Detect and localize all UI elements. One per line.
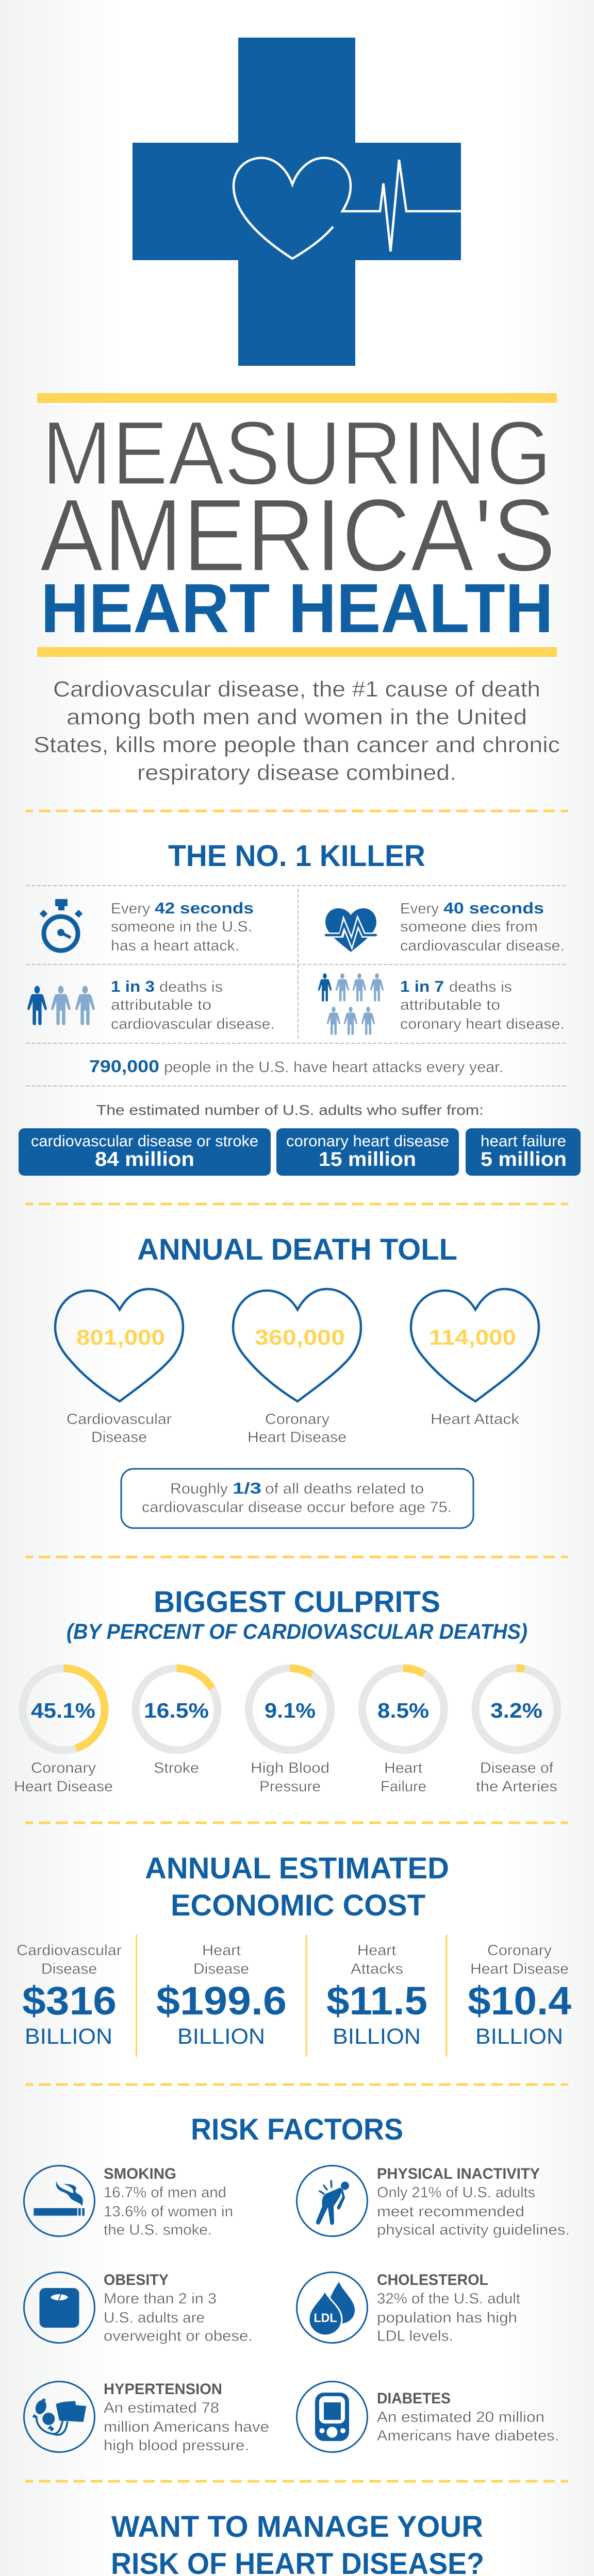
ring: high blood pressure 9.1%: High Blood bbox=[251, 1760, 329, 1776]
text: 1 in 3 deaths: attributable to bbox=[111, 997, 211, 1013]
title: MEASURING bbox=[42, 403, 552, 504]
text: diabetes: Americans have diabetes. bbox=[377, 2428, 559, 2444]
stat: heart attacks $11.5 billion bbox=[326, 1942, 427, 2049]
box: cardiovascular disease or stroke bbox=[19, 1128, 271, 1176]
section: annual death toll bbox=[55, 1233, 539, 1528]
text: cholesterol: 32% of the U.S. adult bbox=[377, 2291, 520, 2307]
box: cardiovascular disease or stroke: 84 million bbox=[95, 1148, 194, 1171]
ring: heart failure 8.5%: Failure bbox=[381, 1778, 426, 1795]
ring: heart failure 8.5% bbox=[362, 1668, 444, 1795]
stat: heart attacks $11.5 billion: Heart bbox=[357, 1942, 396, 1959]
ring: heart failure 8.5%: Heart bbox=[384, 1760, 422, 1776]
heart: heart attack bbox=[411, 1289, 539, 1428]
text: smoking: 16.7% of men and bbox=[104, 2184, 226, 2201]
icon: 1 in 3 people bbox=[27, 986, 95, 1025]
heart: heart attack: 114,000 bbox=[429, 1325, 516, 1349]
ring: stroke 16.5%: 16.5% bbox=[144, 1699, 209, 1722]
text: hypertension: million Americans have bbox=[104, 2419, 269, 2435]
stat: cardiovascular disease $316 billion: $316 bbox=[22, 1979, 117, 2023]
stat: cardiovascular disease $316 billion: BILLION bbox=[25, 2024, 112, 2049]
heart: coronary heart disease bbox=[233, 1289, 361, 1446]
ring: coronary heart disease 45.1%: Coronary bbox=[31, 1760, 96, 1776]
text: physical inactivity: meet recommended bbox=[377, 2204, 524, 2220]
text: obesity: More than 2 in 3 bbox=[104, 2291, 217, 2307]
callout: 1/3 before age 75: of all deaths related to bbox=[265, 1481, 424, 1497]
heading: annual death toll: ANNUAL DEATH TOLL bbox=[137, 1233, 457, 1266]
ring: coronary heart disease 45.1% bbox=[14, 1668, 113, 1795]
icon: cigarette bbox=[24, 2166, 95, 2236]
ring: coronary heart disease 45.1%: 45.1% bbox=[31, 1699, 95, 1722]
ring: high blood pressure 9.1% bbox=[249, 1668, 331, 1795]
section: risk factors bbox=[24, 2113, 570, 2454]
heart: coronary heart disease: 360,000 bbox=[255, 1325, 345, 1349]
icon: blue medical cross with heart and heartbeat line bbox=[133, 38, 461, 366]
text: physical inactivity bbox=[377, 2165, 570, 2238]
heading: annual estimated economic cost: ECONOMIC COST bbox=[171, 1889, 425, 1922]
text: 1 in 7 deaths: deaths is bbox=[449, 979, 512, 995]
heading: biggest culprits: BIGGEST CULPRITS bbox=[154, 1585, 440, 1619]
text: 790,000 heart attacks: 790,000 bbox=[89, 1057, 159, 1076]
text: physical inactivity: Only 21% of U.S. adults bbox=[377, 2184, 535, 2201]
ring: high blood pressure 9.1%: 9.1% bbox=[265, 1699, 316, 1722]
text: every 42 seconds bbox=[111, 899, 254, 954]
text: physical inactivity: physical activity guidelines. bbox=[377, 2222, 570, 2238]
ring: stroke 16.5% bbox=[136, 1668, 218, 1776]
text: diabetes: DIABETES bbox=[377, 2390, 451, 2407]
ring: disease of the arteries 3.2% bbox=[475, 1668, 557, 1795]
text: diabetes: An estimated 20 million bbox=[377, 2409, 544, 2426]
intro paragraph: among both men and women in the United bbox=[67, 705, 527, 730]
icon: person with back pain bbox=[297, 2166, 367, 2236]
text: 1 in 7 deaths: attributable to bbox=[400, 997, 500, 1013]
text: obesity: OBESITY bbox=[104, 2272, 169, 2289]
ring: heart failure 8.5%: 8.5% bbox=[377, 1699, 429, 1722]
stat: coronary heart disease $10.4 billion: Coronary bbox=[487, 1942, 552, 1959]
text: cholesterol: CHOLESTEROL bbox=[377, 2272, 488, 2289]
text: 1 in 7 deaths bbox=[400, 977, 565, 1032]
stat: coronary heart disease $10.4 billion: Heart Disease bbox=[470, 1961, 569, 1977]
box: heart failure bbox=[466, 1128, 581, 1176]
callout: 1/3 before age 75: cardiovascular disease occur before age 75. bbox=[142, 1499, 452, 1516]
stat: heart disease $199.6 billion: BILLION bbox=[177, 2024, 265, 2049]
text: 1 in 7 deaths: coronary heart disease. bbox=[400, 1016, 565, 1032]
ring: disease of the arteries 3.2%: the Arteries bbox=[476, 1778, 557, 1795]
text: 1 in 3 deaths: 1 in 3 bbox=[111, 977, 155, 995]
text: cholesterol: population has high bbox=[377, 2310, 517, 2326]
section: manage your risk bbox=[75, 2510, 546, 2576]
text: diabetes bbox=[377, 2390, 559, 2444]
heading: want to manage your risk bbox=[111, 2510, 484, 2576]
box: cardiovascular disease or stroke: cardiovascular disease or stroke bbox=[31, 1132, 258, 1150]
callout: 1/3 before age 75 bbox=[121, 1469, 473, 1528]
stat: cardiovascular disease $316 billion bbox=[16, 1942, 122, 2049]
stat: heart disease $199.6 billion: Heart bbox=[202, 1942, 241, 1959]
text: 1 in 3 deaths bbox=[111, 977, 275, 1032]
icon: scale bbox=[24, 2272, 95, 2343]
ring: disease of the arteries 3.2%: Disease of bbox=[480, 1760, 554, 1776]
text: every 42 seconds: someone in the U.S. bbox=[111, 919, 252, 935]
title: HEART HEALTH bbox=[41, 569, 553, 647]
text: 1 in 3 deaths: deaths is bbox=[159, 979, 223, 995]
box: coronary heart disease bbox=[276, 1128, 459, 1176]
stat: coronary heart disease $10.4 billion: $10.4 bbox=[468, 1979, 571, 2023]
text: smoking: the U.S. smoke. bbox=[104, 2222, 212, 2238]
intro paragraph: States, kills more people than cancer and chronic bbox=[34, 733, 560, 757]
ring: stroke 16.5%: Stroke bbox=[154, 1760, 199, 1776]
heart: cardiovascular disease: Disease bbox=[91, 1429, 147, 1446]
heart: coronary heart disease: Heart Disease bbox=[248, 1429, 346, 1446]
ring: coronary heart disease 45.1%: Heart Disease bbox=[14, 1778, 113, 1795]
stat: coronary heart disease $10.4 billion bbox=[468, 1942, 571, 2049]
callout: 1/3 before age 75: Roughly bbox=[170, 1481, 228, 1497]
intro paragraph: Cardiovascular disease, the #1 cause of death bbox=[53, 677, 540, 702]
text: smoking bbox=[104, 2165, 233, 2238]
heart: heart attack: Heart Attack bbox=[431, 1411, 520, 1428]
stat: heart attacks $11.5 billion: $11.5 bbox=[326, 1979, 427, 2023]
heart: cardiovascular disease: Cardiovascular bbox=[67, 1411, 172, 1428]
intro paragraph: respiratory disease combined. bbox=[137, 760, 456, 785]
stat: heart attacks $11.5 billion: Attacks bbox=[351, 1961, 403, 1977]
box: coronary heart disease: 15 million bbox=[319, 1148, 416, 1171]
callout: 1/3 before age 75: 1/3 bbox=[233, 1479, 261, 1497]
icon: blood pressure cuff bbox=[24, 2381, 95, 2452]
title: AMERICA'S bbox=[40, 477, 556, 593]
title bbox=[40, 403, 556, 647]
ring: disease of the arteries 3.2%: 3.2% bbox=[490, 1699, 542, 1722]
text: obesity bbox=[104, 2272, 253, 2344]
intro paragraph bbox=[34, 677, 560, 785]
heart: cardiovascular disease bbox=[55, 1289, 183, 1446]
section: the no. 1 killer bbox=[19, 839, 581, 1176]
ring: high blood pressure 9.1%: Pressure bbox=[259, 1778, 321, 1795]
text: every 40 seconds: Every bbox=[400, 901, 439, 917]
heading: biggest culprits bbox=[67, 1585, 527, 1643]
text: every 40 seconds: cardiovascular disease. bbox=[400, 938, 565, 954]
text: every 40 seconds: 40 seconds bbox=[443, 899, 544, 917]
text: physical inactivity: PHYSICAL INACTIVITY bbox=[377, 2165, 540, 2182]
text: every 42 seconds: Every bbox=[111, 901, 151, 917]
text: cholesterol bbox=[377, 2272, 520, 2344]
heading: the no. 1 killer: THE NO. 1 KILLER bbox=[168, 839, 425, 873]
stat: coronary heart disease $10.4 billion: BILLION bbox=[475, 2024, 563, 2049]
text: hypertension: HYPERTENSION bbox=[104, 2381, 222, 2398]
text: hypertension bbox=[104, 2381, 269, 2454]
text: obesity: U.S. adults are bbox=[104, 2310, 205, 2326]
text: 1 in 3 deaths: cardiovascular disease. bbox=[111, 1016, 275, 1032]
icon: glucose meter bbox=[297, 2381, 367, 2452]
text: every 40 seconds bbox=[400, 899, 565, 954]
text: 790,000 heart attacks: people in the U.S. have heart attacks every year. bbox=[164, 1059, 503, 1076]
text: smoking: SMOKING bbox=[104, 2165, 176, 2182]
text: estimated number intro: The estimated number of U.S. adults who suffer from: bbox=[96, 1102, 484, 1118]
icon: LDL droplets bbox=[297, 2272, 367, 2343]
stat: heart disease $199.6 billion bbox=[156, 1942, 287, 2049]
icon: heart with pulse bbox=[322, 908, 380, 952]
text: obesity: overweight or obese. bbox=[104, 2328, 253, 2344]
text: every 40 seconds: someone dies from bbox=[400, 919, 538, 935]
box: coronary heart disease: coronary heart disease bbox=[286, 1132, 449, 1150]
stat: heart attacks $11.5 billion: BILLION bbox=[333, 2024, 421, 2049]
text: hypertension: An estimated 78 bbox=[104, 2400, 219, 2416]
stat: heart disease $199.6 billion: Disease bbox=[193, 1961, 249, 1977]
stat: cardiovascular disease $316 billion: Disease bbox=[41, 1961, 97, 1977]
heading: annual estimated economic cost bbox=[145, 1852, 449, 1922]
section: annual estimated economic cost bbox=[16, 1852, 571, 2057]
icon: stopwatch bbox=[40, 899, 82, 951]
heart: cardiovascular disease: 801,000 bbox=[76, 1325, 165, 1349]
stat: heart disease $199.6 billion: $199.6 bbox=[156, 1979, 287, 2023]
heading: biggest culprits: (BY PERCENT OF CARDIOVASCULAR DEATHS) bbox=[67, 1619, 527, 1643]
section: biggest culprits bbox=[14, 1585, 557, 1795]
text: cholesterol: LDL levels. bbox=[377, 2328, 453, 2344]
box: heart failure: 5 million bbox=[481, 1148, 567, 1171]
icon: LDL droplets: LDL bbox=[314, 2311, 337, 2325]
heart: coronary heart disease: Coronary bbox=[265, 1411, 330, 1428]
text: every 42 seconds: 42 seconds bbox=[155, 899, 254, 917]
text: 1 in 7 deaths: 1 in 7 bbox=[400, 977, 444, 995]
text: hypertension: high blood pressure. bbox=[104, 2437, 249, 2454]
heading: annual estimated economic cost: ANNUAL ESTIMATED bbox=[145, 1852, 449, 1885]
stat: cardiovascular disease $316 billion: Cardiovascular bbox=[16, 1942, 122, 1959]
text: smoking: 13.6% of women in bbox=[104, 2204, 233, 2220]
text: every 42 seconds: has a heart attack. bbox=[111, 938, 239, 954]
box: heart failure: heart failure bbox=[481, 1132, 566, 1150]
heading: risk factors: RISK FACTORS bbox=[191, 2113, 403, 2146]
heading: want to manage your risk: WANT TO MANAGE YOUR bbox=[111, 2510, 483, 2544]
icon: 1 in 7 people bbox=[318, 973, 384, 1035]
